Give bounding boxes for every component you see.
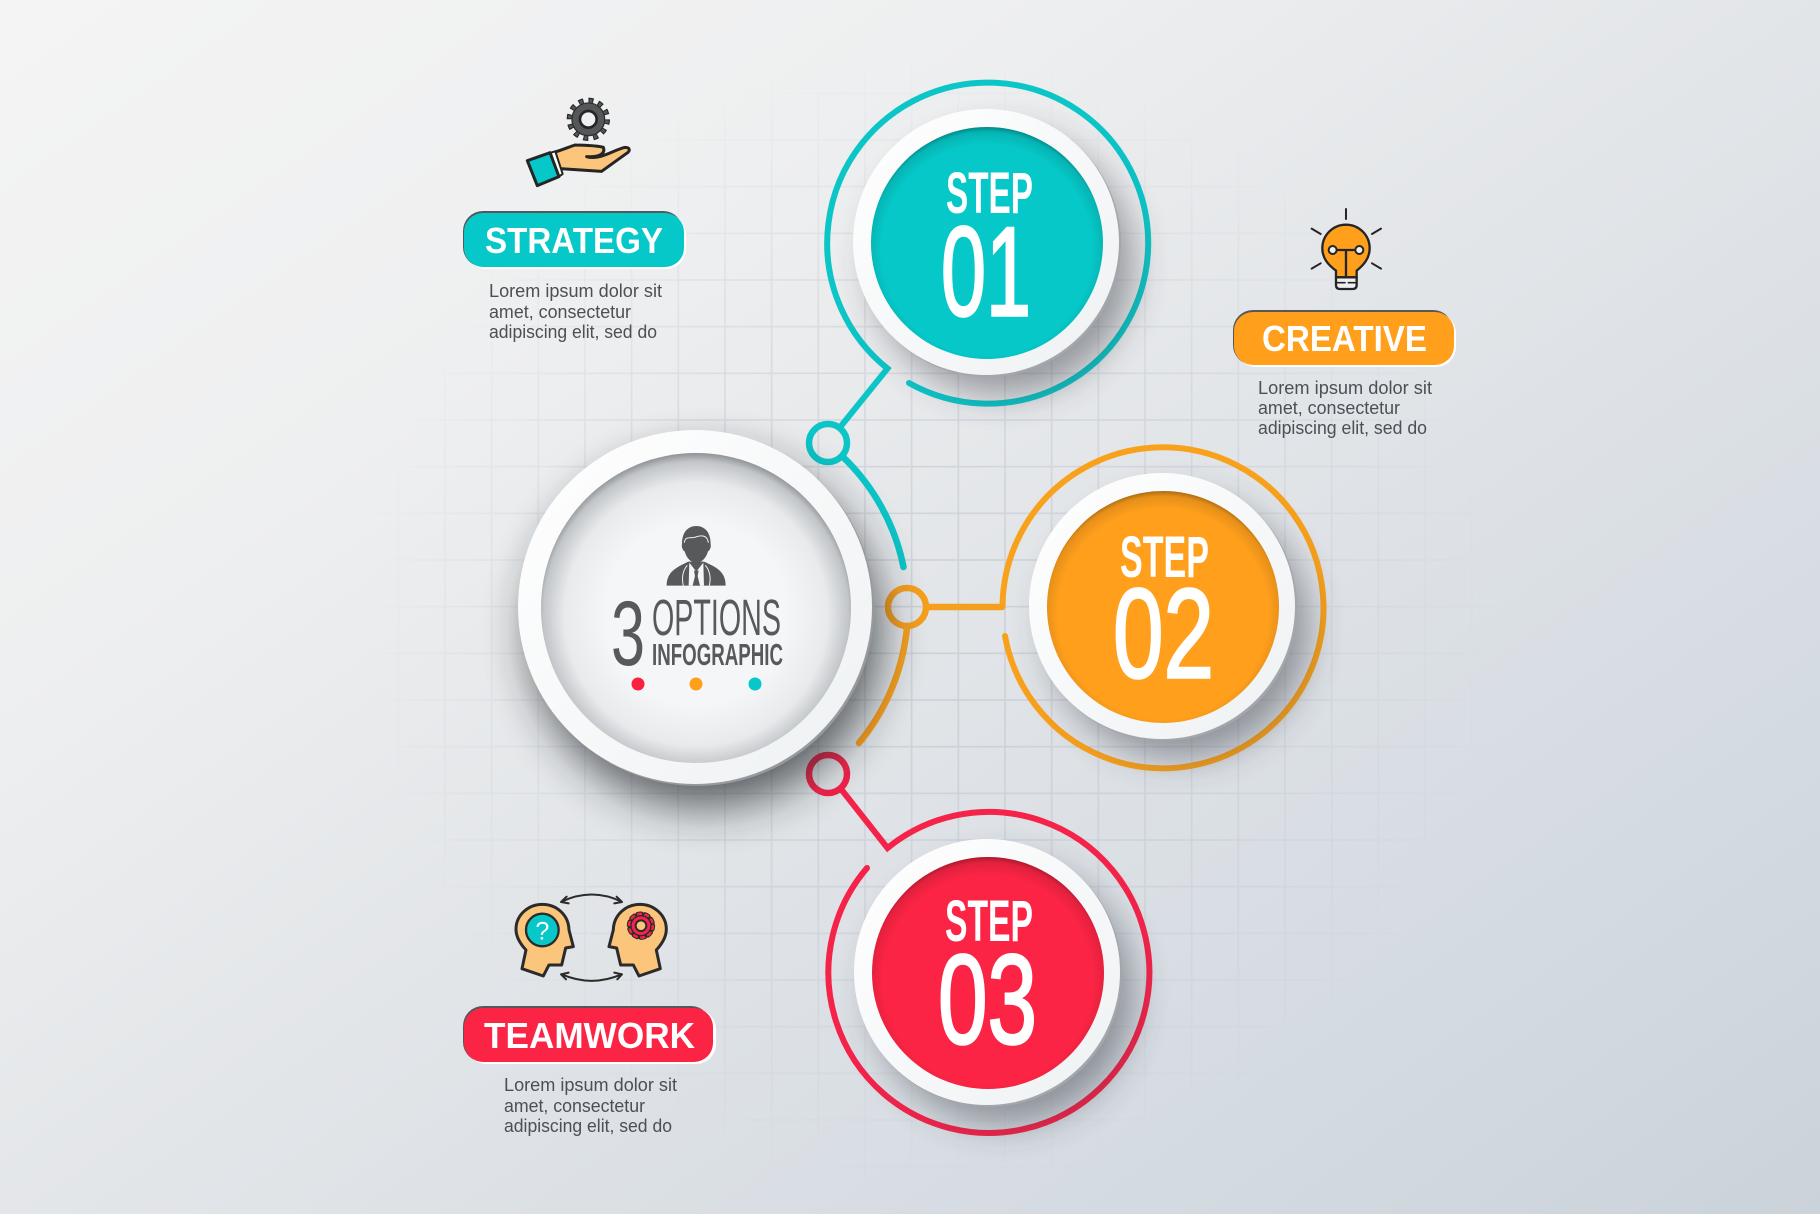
center shadow [529, 455, 881, 807]
teamwork text: adipiscing elit, sed do [504, 1115, 672, 1136]
teamwork text [504, 1074, 677, 1136]
step 01 label: 01 [941, 200, 1031, 342]
step 03 label [938, 889, 1037, 1070]
icon: hand with gear [527, 102, 629, 186]
teamwork block [463, 894, 716, 1136]
icon: two heads exchanging ideas [516, 894, 666, 981]
step 01 label: STEP [946, 161, 1033, 226]
center title: OPTIONS [652, 589, 781, 646]
step 02 disc [1029, 473, 1297, 741]
step 01 label [941, 161, 1033, 342]
center title [611, 583, 783, 685]
red connector [809, 755, 847, 793]
step 03 label: STEP [945, 889, 1033, 954]
step 02 label: 02 [1113, 562, 1214, 704]
creative text [1258, 377, 1432, 438]
icon: two heads exchanging ideas: ? [535, 917, 549, 945]
teamwork tag: TEAMWORK [484, 1015, 695, 1056]
center title: 3 [611, 583, 645, 685]
step 01 panel [827, 83, 1148, 426]
step 02 label [1113, 525, 1214, 704]
icon: businessman [667, 526, 726, 586]
step 02 outer ring [1002, 447, 1323, 768]
center disc [518, 430, 874, 786]
background grid [468, 163, 1369, 1038]
teamwork text: amet, consectetur [504, 1095, 645, 1116]
strategy text: amet, consectetur [489, 301, 631, 322]
creative tag [1233, 310, 1456, 367]
strategy tag [463, 211, 686, 269]
creative text: adipiscing elit, sed do [1258, 417, 1427, 438]
strategy text: adipiscing elit, sed do [489, 321, 657, 342]
teamwork tag [463, 1006, 716, 1064]
step 03 disc [854, 839, 1122, 1107]
step 02 label: STEP [1120, 525, 1209, 590]
step 01 disc [853, 109, 1121, 377]
strategy block [463, 102, 686, 342]
teal connector [809, 424, 904, 567]
strategy text [489, 280, 662, 342]
creative text: amet, consectetur [1258, 397, 1400, 418]
strategy tag: STRATEGY [485, 220, 663, 261]
step 02 shadow [1049, 498, 1309, 758]
step 03 shadow [874, 864, 1134, 1124]
strategy text: Lorem ipsum dolor sit [489, 280, 662, 301]
creative text: Lorem ipsum dolor sit [1258, 377, 1432, 398]
center panel [518, 430, 874, 786]
step 03 outer ring [828, 789, 1149, 1133]
step 01 outer ring [827, 83, 1148, 426]
color dots [632, 678, 762, 690]
creative block [1233, 209, 1456, 438]
step 03 label: 03 [938, 928, 1037, 1070]
step 02 panel [1002, 447, 1323, 768]
teamwork text: Lorem ipsum dolor sit [504, 1074, 677, 1095]
creative tag: CREATIVE [1262, 318, 1427, 359]
center title: INFOGRAPHIC [652, 637, 783, 672]
step 03 panel [828, 789, 1149, 1133]
orange connector [859, 588, 1002, 743]
step 01 shadow [873, 134, 1133, 394]
icon: light bulb [1312, 209, 1381, 289]
